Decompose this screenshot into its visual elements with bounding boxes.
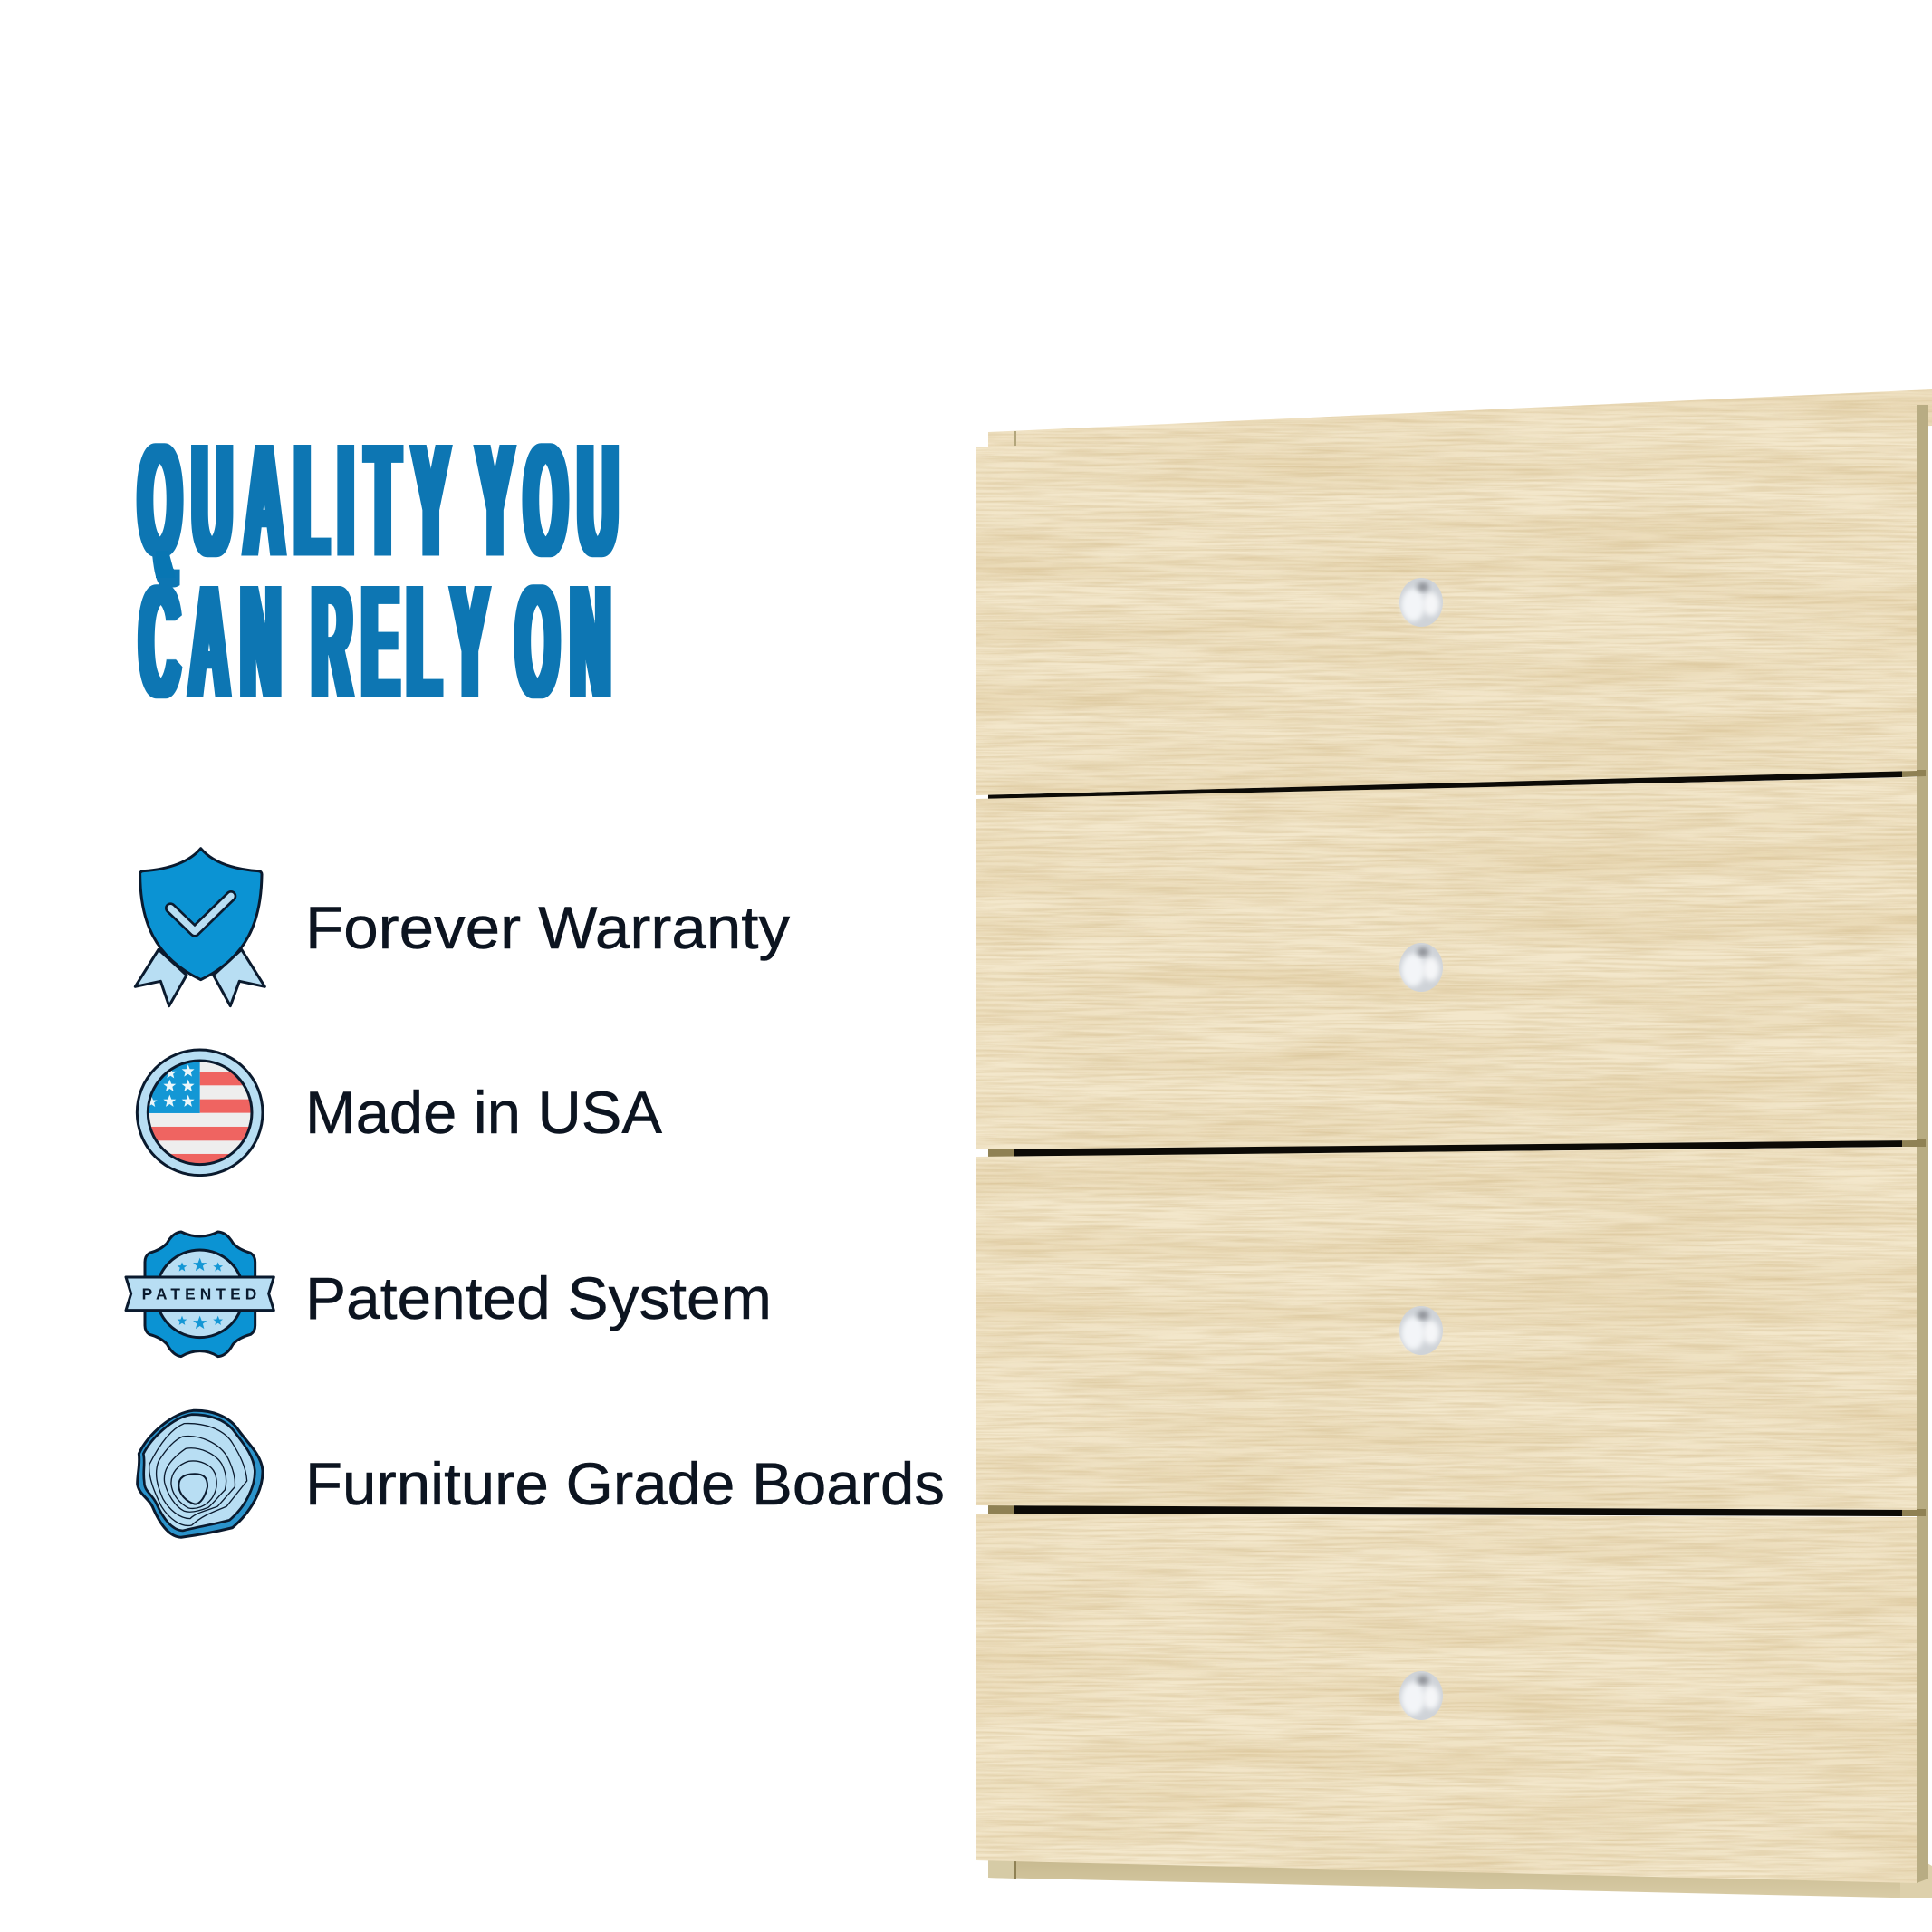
- title: QUALITY YOU: [139, 411, 618, 591]
- knob 1: [1399, 578, 1443, 627]
- dresser illustration: [976, 389, 1932, 1898]
- icon: patented seal: PATENTED: [142, 1284, 256, 1302]
- label: patented system: Patented System: [305, 1264, 772, 1331]
- title: CAN RELY ON: [139, 553, 610, 732]
- drawer 3: [976, 1147, 1917, 1510]
- label: furniture grade boards: Furniture Grade Boards: [305, 1450, 945, 1517]
- icon: tree rings: [138, 1410, 263, 1537]
- icon: usa flag badge: [137, 1050, 263, 1176]
- drawer 4: [976, 1514, 1917, 1883]
- icon: patented seal: [126, 1232, 274, 1357]
- drawer gaps: [988, 770, 1926, 1516]
- knob 4: [1399, 1671, 1443, 1720]
- label: forever warranty: Forever Warranty: [305, 894, 790, 961]
- infographic canvas: [125, 389, 1932, 1898]
- knob 3: [1399, 1306, 1443, 1355]
- drawer 2: [976, 777, 1917, 1149]
- title: [139, 411, 618, 732]
- label: made in usa: Made in USA: [305, 1079, 662, 1146]
- icon: warranty shield: [135, 849, 264, 1006]
- knob 2: [1399, 943, 1443, 992]
- drawer 1: [976, 405, 1917, 795]
- dresser carcass: [988, 389, 1932, 1898]
